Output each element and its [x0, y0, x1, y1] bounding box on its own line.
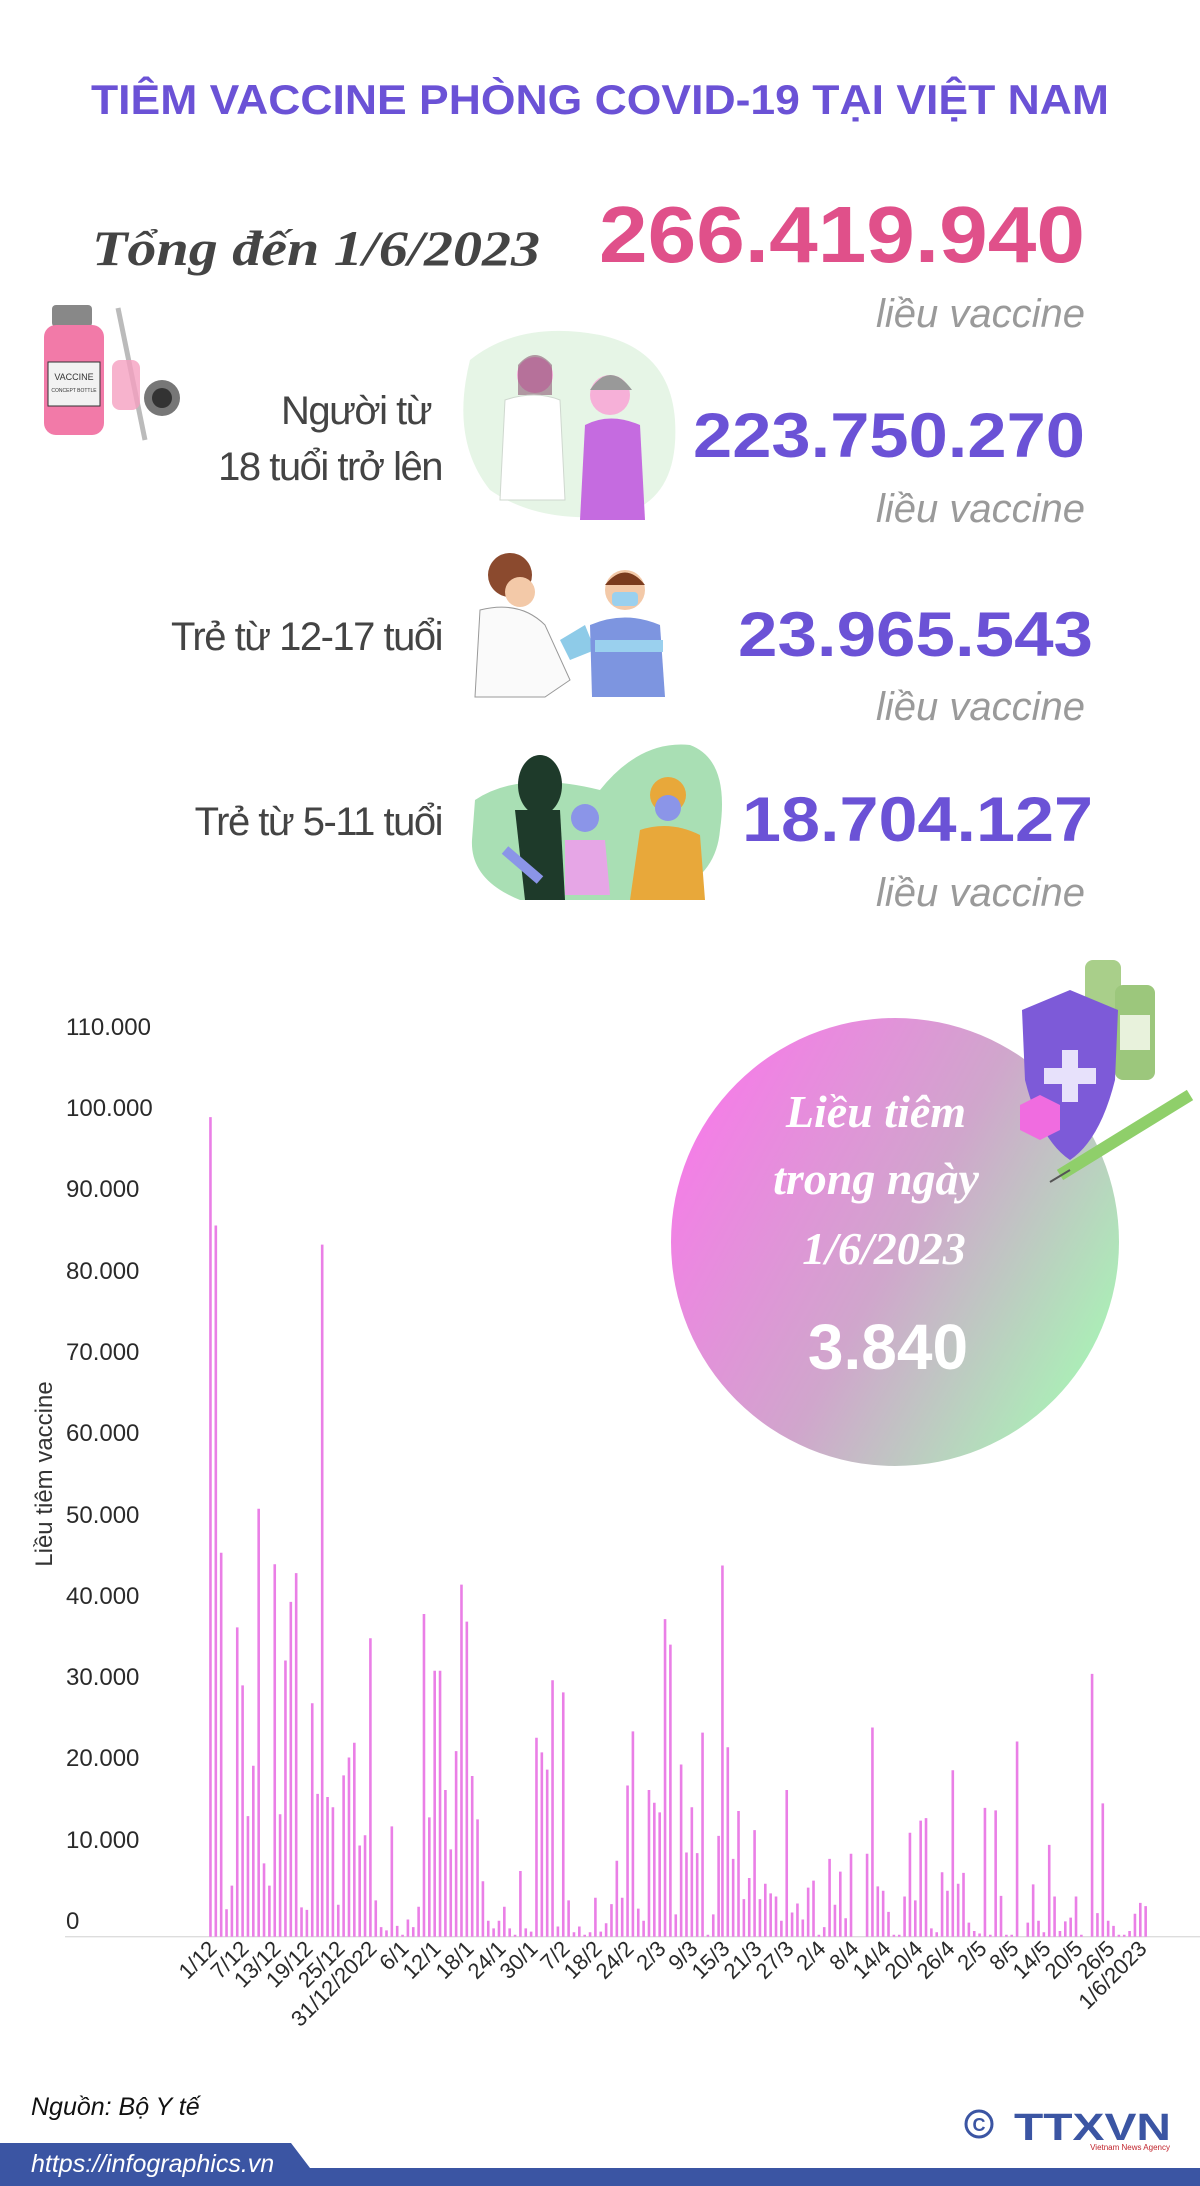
x-axis labels: 2/3	[631, 1936, 671, 1975]
number: adults: 223.750.270	[693, 401, 1085, 471]
x-axis labels: 21/3	[719, 1936, 767, 1984]
y-axis labels: 10.000	[66, 1827, 139, 1854]
y-axis labels: 70.000	[66, 1339, 139, 1366]
logo: TTXVN: TTXVN	[1014, 2107, 1171, 2149]
x-axis labels: 2/4	[791, 1936, 831, 1975]
title: TIÊM VACCINE PHÒNG COVID-19 TẠI VIỆT NAM	[91, 75, 1109, 123]
x-axis labels: 14/5	[1008, 1936, 1056, 1984]
x-axis labels: 30/1	[495, 1936, 543, 1984]
x-axis labels: 31/12/2022	[286, 1936, 382, 2031]
total number: 266.419.940	[599, 190, 1085, 279]
icon: shield, vials, syringe	[1020, 960, 1190, 1182]
callout circle: daily doses	[671, 1018, 1119, 1466]
icon: vaccine bottle: CONCEPT BOTTLE	[51, 388, 97, 394]
total number	[599, 190, 1085, 336]
footer band	[0, 2143, 1200, 2186]
y-axis labels: 40.000	[66, 1583, 139, 1610]
illustration: adult vaccination	[463, 331, 675, 520]
x-axis labels: 26/4	[912, 1936, 960, 1984]
y-axis labels: 20.000	[66, 1745, 139, 1772]
x-axis labels: 24/2	[591, 1936, 639, 1984]
x-axis labels: 27/3	[751, 1936, 799, 1984]
x-axis labels: 6/1	[374, 1936, 414, 1975]
x-axis labels	[174, 1936, 1152, 2031]
footer band: https://infographics.vn	[31, 2150, 274, 2178]
x-axis labels: 2/5	[952, 1936, 992, 1975]
label: 12-17: Trẻ từ 12-17 tuổi	[171, 615, 442, 659]
y-axis labels: 100.000	[66, 1095, 153, 1122]
x-axis labels: 20/4	[880, 1936, 928, 1984]
illustration: teen vaccination	[475, 553, 665, 697]
x-axis labels: 7/2	[535, 1936, 575, 1975]
label: 5-11: Trẻ từ 5-11 tuổi	[195, 800, 442, 844]
y-axis labels: 50.000	[66, 1502, 139, 1529]
x-axis labels: 9/3	[663, 1936, 703, 1975]
logo: TTXVN	[966, 2107, 1171, 2152]
x-axis labels: 1/12	[174, 1936, 222, 1984]
x-axis labels: 8/4	[824, 1936, 864, 1975]
number: 12-17: 23.965.543	[738, 600, 1093, 670]
x-axis labels: 7/12	[206, 1936, 254, 1984]
illustration: child vaccination	[472, 745, 722, 900]
icon: vaccine bottle	[44, 305, 180, 440]
logo: TTXVN: Vietnam News Agency	[1090, 2143, 1170, 2152]
x-axis labels: 19/12	[261, 1936, 318, 1992]
total label: Tổng đến 1/6/2023	[92, 220, 540, 276]
y-axis labels	[66, 1014, 153, 1935]
number: adults	[693, 401, 1085, 531]
x-axis labels: 1/6/2023	[1073, 1936, 1152, 2014]
y-axis title: Liều tiêm vaccine	[31, 1381, 58, 1567]
x-axis labels: 25/12	[293, 1936, 350, 1992]
x-axis labels: 26/5	[1072, 1936, 1120, 1984]
label: adults: Người từ	[281, 389, 432, 433]
x-axis labels: 14/4	[848, 1936, 896, 1984]
callout circle: daily doses: 1/6/2023	[802, 1223, 966, 1274]
y-axis labels: 60.000	[66, 1420, 139, 1447]
x-axis labels: 20/5	[1040, 1936, 1088, 1984]
x-axis labels: 24/1	[463, 1936, 511, 1984]
icon: vaccine bottle: VACCINE	[54, 372, 94, 382]
number: 12-17: liều vaccine	[876, 685, 1085, 729]
y-axis labels: 110.000	[66, 1014, 151, 1041]
x-axis labels: 8/5	[984, 1936, 1024, 1975]
label: adults: 18 tuổi trở lên	[218, 445, 442, 489]
x-axis labels: 18/1	[431, 1936, 479, 1984]
x-axis labels: 13/12	[229, 1936, 286, 1992]
number: 5-11: liều vaccine	[876, 871, 1085, 915]
number: 5-11	[742, 785, 1093, 915]
number: 5-11: 18.704.127	[742, 785, 1093, 855]
callout circle: daily doses: trong ngày	[773, 1153, 979, 1204]
x-axis labels: 18/2	[559, 1936, 607, 1984]
y-axis labels: 80.000	[66, 1258, 139, 1285]
callout circle: daily doses: 3.840	[808, 1311, 968, 1383]
y-axis labels: 0	[66, 1908, 79, 1935]
source: Nguồn: Bộ Y tế	[31, 2093, 202, 2121]
y-axis labels: 90.000	[66, 1176, 139, 1203]
callout circle: daily doses: Liều tiêm	[785, 1086, 966, 1137]
logo: TTXVN: C	[972, 2115, 986, 2135]
y-axis labels: 30.000	[66, 1664, 139, 1691]
number: adults: liều vaccine	[876, 487, 1085, 531]
x-axis labels: 15/3	[687, 1936, 735, 1984]
bar chart	[65, 1117, 1200, 1937]
total number: liều vaccine	[876, 292, 1085, 336]
x-axis labels: 12/1	[398, 1936, 446, 1984]
number: 12-17	[738, 600, 1093, 729]
label: adults	[218, 389, 442, 489]
